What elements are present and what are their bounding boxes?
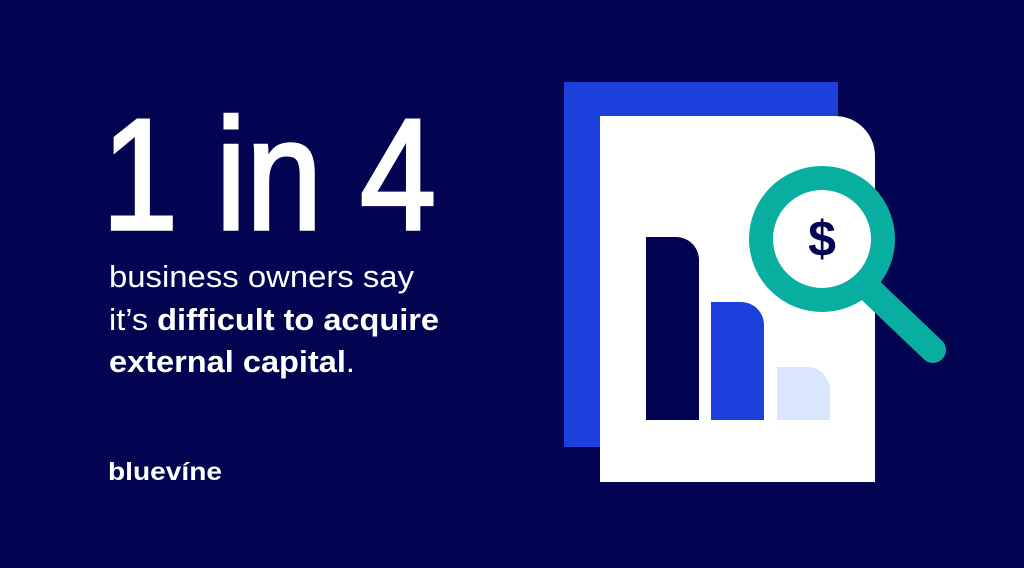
icon: magnifying glass bbox=[761, 178, 933, 350]
body text bbox=[109, 259, 439, 379]
body text: business owners say bbox=[109, 259, 415, 294]
logo: bluevine: bluevíne bbox=[108, 458, 222, 486]
dollar sign: $ bbox=[808, 211, 836, 267]
body text: external capital . bbox=[109, 344, 355, 379]
body text: it’s difficult to acquire bbox=[109, 302, 439, 337]
back blue sheet bbox=[564, 82, 838, 447]
bar chart bbox=[646, 237, 830, 420]
illustration: document with chart and magnifier bbox=[564, 82, 933, 482]
white document bbox=[600, 116, 875, 482]
headline: 1 in 4: 1 in 4 bbox=[102, 87, 436, 263]
